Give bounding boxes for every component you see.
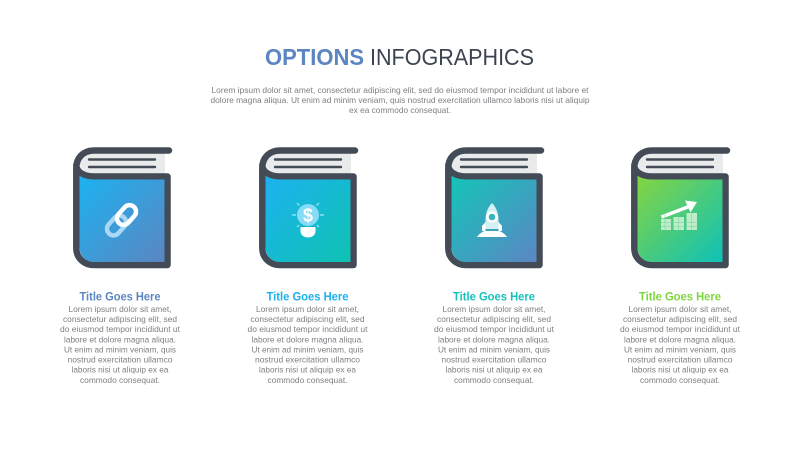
- option 1 text: laboris nisi ut aliquip ex ea: [72, 364, 169, 374]
- option 3 text: commodo consequat.: [454, 375, 534, 385]
- panel: option 4 book: [634, 150, 727, 265]
- book frame: [634, 150, 727, 265]
- intro text: Lorem ipsum dolor sit amet, consectetur adipiscing elit, sed do eiusmod tempor incididunt ut labore et: [212, 85, 589, 95]
- option 2 text: consectetur adipiscing elit, sed: [250, 314, 365, 324]
- icon: light bulb with dollar: $: [303, 206, 313, 226]
- book frame: [262, 150, 355, 265]
- option 2 text: labore et dolore magna aliqua.: [252, 334, 364, 344]
- panel: option 1 book: [76, 150, 169, 265]
- intro text: dolore magna aliqua. Ut enim ad minim veniam, quis nostrud exercitation ullamco laboris nisi ut aliquip: [210, 95, 590, 105]
- option 3 text: do eiusmod tempor incididunt ut: [434, 324, 555, 334]
- title: [265, 44, 534, 70]
- option 2 text: Ut enim ad minim veniam, quis: [252, 344, 364, 354]
- book cover: [80, 176, 164, 262]
- option 4 text: nostrud exercitation ullamco: [628, 354, 733, 364]
- book cover: [452, 176, 536, 262]
- option 4 text: labore et dolore magna aliqua.: [624, 334, 736, 344]
- option 1 text: consectetur adipiscing elit, sed: [63, 314, 177, 324]
- option 4 text: [620, 292, 741, 385]
- option 4 text: Ut enim ad minim veniam, quis: [624, 344, 736, 354]
- option 2 text: do eiusmod tempor incididunt ut: [248, 324, 368, 334]
- option 3 text: consectetur adipiscing elit, sed: [437, 314, 551, 324]
- page lines: [647, 160, 713, 167]
- option 2 text: [248, 292, 368, 385]
- option 2 text: nostrud exercitation ullamco: [255, 354, 360, 364]
- option 3 text: Ut enim ad minim veniam, quis: [438, 344, 550, 354]
- panel: option 2 book: [262, 150, 355, 265]
- option 1 text: do eiusmod tempor incididunt ut: [60, 324, 181, 334]
- option 2 text: Lorem ipsum dolor sit amet,: [256, 304, 359, 314]
- option 3 text: [434, 292, 555, 385]
- intro text: [210, 85, 590, 115]
- page lines: [89, 160, 155, 167]
- option 3 text: laboris nisi ut aliquip ex ea: [446, 364, 543, 374]
- panel: option 3 book: [448, 150, 541, 265]
- book cover: [266, 176, 350, 262]
- option 4 text: Lorem ipsum dolor sit amet,: [628, 304, 732, 314]
- option 4 text: Title Goes Here: [639, 292, 721, 304]
- book pages: [452, 153, 537, 174]
- book pages: [266, 153, 351, 174]
- title: OPTIONS: [265, 44, 364, 70]
- option 1 text: [60, 292, 181, 385]
- option 1 text: Ut enim ad minim veniam, quis: [64, 344, 176, 354]
- option 2 text: Title Goes Here: [266, 292, 348, 304]
- book cover: [638, 176, 722, 262]
- book pages: [638, 153, 723, 174]
- icon: growth chart: [661, 200, 697, 230]
- title: INFOGRAPHICS: [370, 44, 534, 70]
- option 4 text: laboris nisi ut aliquip ex ea: [632, 364, 729, 374]
- option 1 text: Title Goes Here: [80, 292, 160, 304]
- intro text: ex ea commodo consequat.: [349, 105, 451, 115]
- option 4 text: commodo consequat.: [640, 375, 720, 385]
- page lines: [461, 160, 527, 167]
- option 1 text: Lorem ipsum dolor sit amet,: [68, 304, 172, 314]
- book pages: [80, 153, 165, 174]
- icon: rocket: [477, 203, 507, 237]
- icon: chain link: [104, 202, 139, 238]
- option 1 text: nostrud exercitation ullamco: [68, 354, 173, 364]
- option 2 text: commodo consequat.: [268, 375, 348, 385]
- option 3 text: Title Goes Here: [453, 292, 535, 304]
- book frame: [448, 150, 541, 265]
- option 1 text: commodo consequat.: [80, 375, 160, 385]
- option 3 text: Lorem ipsum dolor sit amet,: [442, 304, 546, 314]
- option 4 text: consectetur adipiscing elit, sed: [623, 314, 737, 324]
- option 3 text: nostrud exercitation ullamco: [442, 354, 547, 364]
- page lines: [275, 160, 341, 167]
- option 1 text: labore et dolore magna aliqua.: [64, 334, 176, 344]
- option 2 text: laboris nisi ut aliquip ex ea: [259, 364, 356, 374]
- option 3 text: labore et dolore magna aliqua.: [438, 334, 550, 344]
- option 4 text: do eiusmod tempor incididunt ut: [620, 324, 741, 334]
- book frame: [76, 150, 169, 265]
